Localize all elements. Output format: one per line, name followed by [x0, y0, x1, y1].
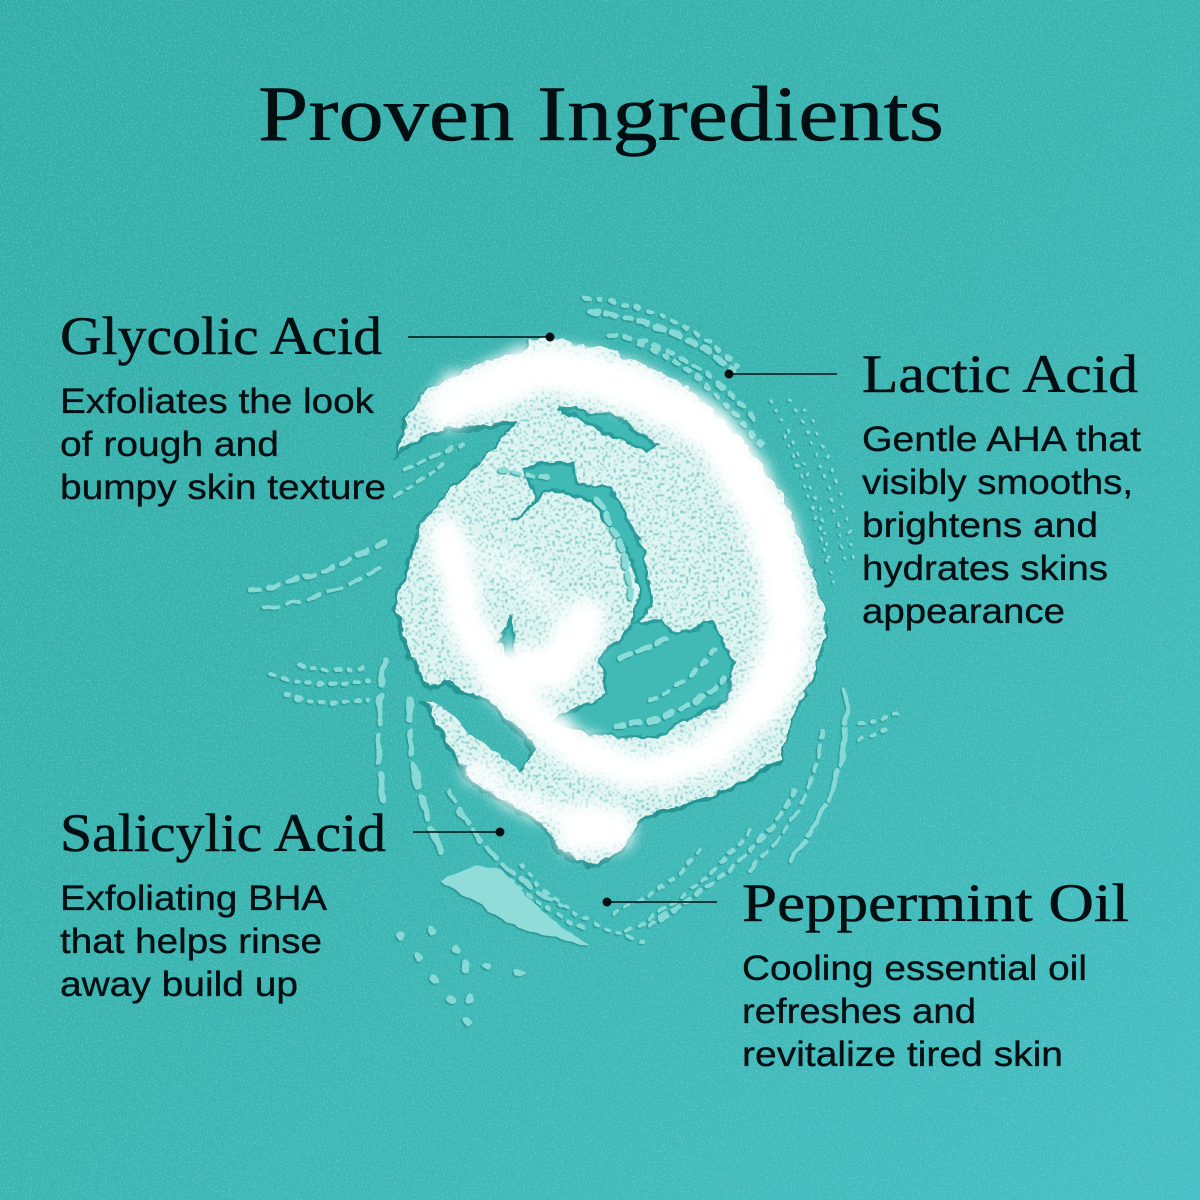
heading: lactic acid: Lactic Acid [862, 344, 1138, 404]
heading: salicylic acid: Salicylic Acid [60, 803, 386, 863]
text: peppermint oil description: revitalize tired skin [742, 1035, 1063, 1074]
text: lactic acid description: appearance [862, 592, 1065, 631]
text: glycolic acid description [60, 382, 386, 507]
foam spray: lower wedge [440, 866, 590, 945]
text: salicylic acid description [60, 879, 328, 1004]
foam swirl illustration [250, 298, 905, 1035]
text: lactic acid description: visibly smooths, [862, 463, 1133, 502]
heading: peppermint oil: Peppermint Oil [742, 873, 1129, 933]
text: salicylic acid description: that helps rinse [60, 922, 322, 961]
white foam brush strokes [447, 368, 787, 830]
text: salicylic acid description: Exfoliating BHA [60, 879, 328, 918]
text: glycolic acid description: of rough and [60, 425, 279, 464]
callout: glycolic acid [60, 306, 554, 507]
text: glycolic acid description: Exfoliates the look [60, 382, 375, 421]
text: lactic acid description: brightens and [862, 506, 1098, 545]
droplets inside the spiral gap [500, 470, 725, 725]
text: lactic acid description: hydrates skins [862, 549, 1108, 588]
leader line: peppermint oil [602, 898, 717, 906]
foam body base [394, 338, 827, 865]
callout: peppermint oil [602, 873, 1129, 1074]
text: glycolic acid description: bumpy skin texture [60, 468, 386, 507]
leader line: glycolic acid [408, 332, 554, 342]
text: salicylic acid description: away build up [60, 965, 298, 1004]
text: peppermint oil description: refreshes and [742, 992, 976, 1031]
text: lactic acid description: Gentle AHA that [862, 420, 1141, 459]
teal spiral gaps inside the foam [500, 409, 733, 736]
text: lactic acid description [862, 420, 1141, 631]
leader line: salicylic acid [413, 828, 504, 836]
heading: glycolic acid: Glycolic Acid [60, 306, 382, 366]
title: Proven Ingredients [258, 70, 944, 157]
callout: lactic acid [724, 344, 1141, 631]
leader line: lactic acid [724, 370, 837, 378]
text: peppermint oil description: Cooling essential oil [742, 949, 1087, 988]
text: peppermint oil description [742, 949, 1087, 1074]
water droplet trails around the foam [250, 298, 905, 1035]
foam bubble texture [395, 338, 827, 863]
callout: salicylic acid [60, 803, 504, 1004]
